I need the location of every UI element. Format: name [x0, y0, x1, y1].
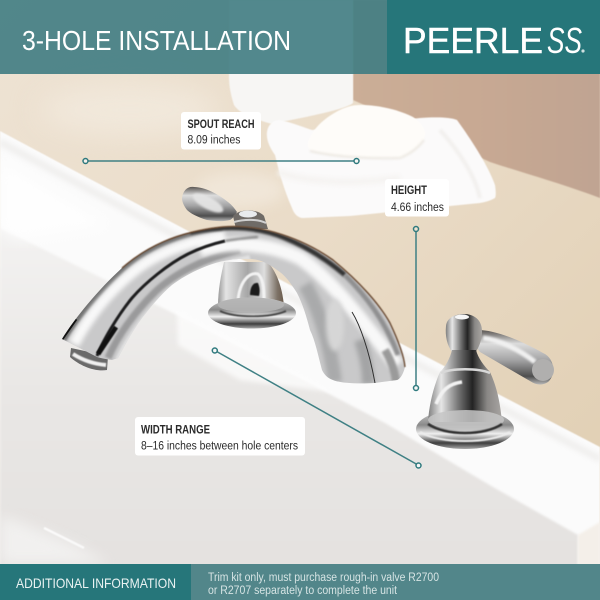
footer: additional information text [191, 564, 600, 600]
callout: height [385, 179, 449, 216]
lower facet light [118, 258, 250, 360]
footer: additional information label [0, 564, 191, 600]
tub lower highlight [44, 528, 84, 548]
callout: height: 4.66 inches [391, 202, 444, 214]
header: translucent title bar [0, 0, 387, 74]
footer: additional information text: or R2707 separately to complete the unit [208, 585, 398, 597]
tip dark edge [62, 319, 76, 339]
title: 3-HOLE INSTALLATION [22, 25, 291, 56]
callout: height: HEIGHT [391, 185, 427, 197]
front handle lever [475, 330, 553, 385]
front handle [416, 314, 554, 449]
footer: additional information label: ADDITIONAL INFORMATION [16, 575, 176, 591]
front handle head [446, 314, 482, 352]
tub rim [0, 131, 600, 600]
folded towel [267, 117, 496, 218]
dimension line: width range [212, 348, 421, 468]
upper facet white band [74, 236, 225, 344]
lower facet gray under dark band [108, 250, 240, 358]
front handle bell [428, 350, 502, 422]
header: logo panel [387, 0, 600, 74]
callout: width range: WIDTH RANGE [141, 424, 210, 436]
soap bar [308, 105, 425, 158]
callout: spout reach: 8.09 inches [188, 134, 241, 146]
logo wordmark: SS [547, 20, 582, 61]
candle jar [229, 0, 353, 124]
logo wordmark: PEERLE [403, 20, 543, 61]
callout: width range: 8–16 inches between hole centers [141, 440, 298, 452]
rim bevel shade [0, 142, 600, 459]
central dark band [97, 241, 225, 356]
outer right chrome [345, 275, 398, 355]
spout [62, 226, 405, 384]
callout: width range [135, 417, 305, 456]
rim corner [578, 522, 600, 600]
leg shade [305, 285, 335, 382]
back handle lever [182, 187, 237, 221]
tub interior [0, 228, 578, 600]
dimension line: spout reach [83, 158, 359, 164]
back handle bell [218, 262, 284, 306]
dimension line: height [414, 226, 418, 390]
front handle flange [416, 409, 514, 449]
outer gray band [62, 227, 222, 339]
back handle cap [233, 210, 268, 229]
top dark streak [190, 228, 345, 275]
callout: spout reach: SPOUT REACH [188, 119, 254, 131]
wall behind counter [353, 0, 600, 198]
right ridge white band [200, 244, 397, 365]
nozzle [70, 348, 108, 370]
footer: additional information text: Trim kit only, must purchase rough-in valve R2700 [208, 572, 439, 584]
callout: spout reach [181, 112, 261, 150]
separator line [352, 312, 375, 383]
back handle flange [208, 298, 296, 328]
brown edge [122, 226, 405, 367]
back handle [182, 187, 296, 328]
